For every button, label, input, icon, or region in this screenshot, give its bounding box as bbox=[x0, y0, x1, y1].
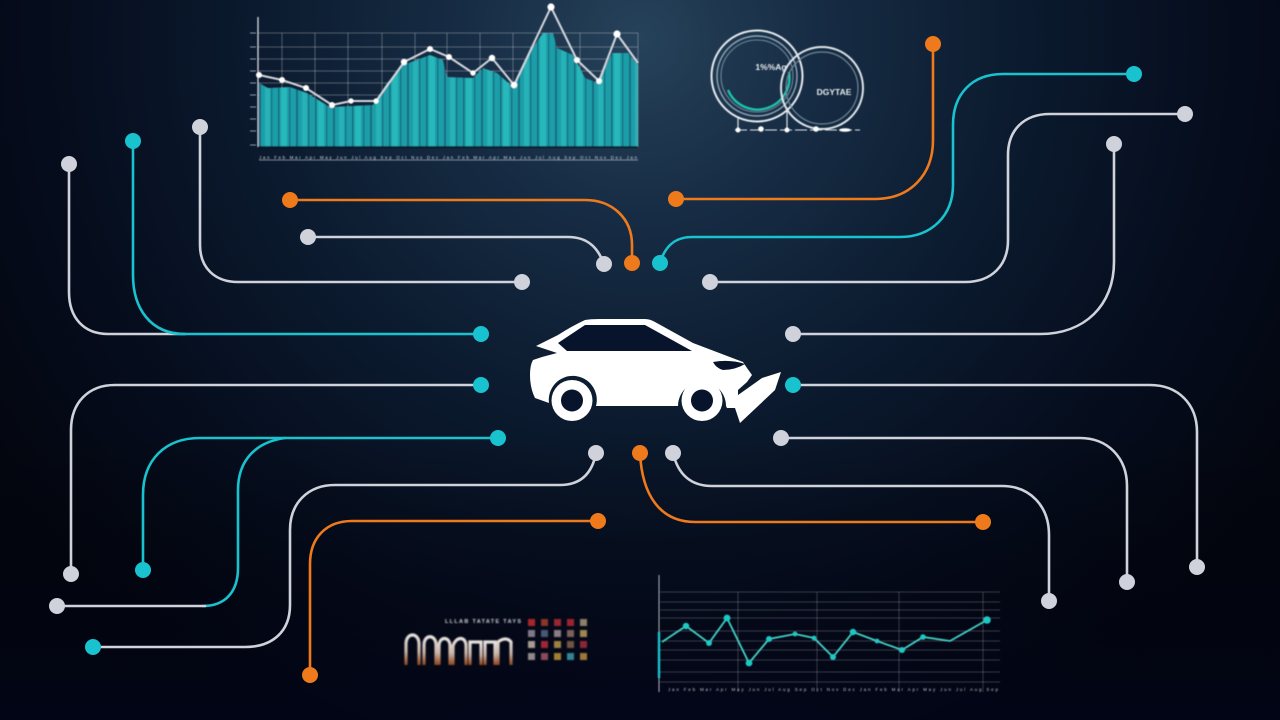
right circle: DGYTAE bbox=[817, 87, 852, 97]
teal dots bbox=[85, 66, 1142, 655]
grey line right upper bbox=[793, 144, 1114, 334]
data line bbox=[662, 618, 987, 663]
grey line upper right bbox=[710, 114, 1185, 282]
line chart bottom right bbox=[659, 575, 1000, 692]
car body and bolt bbox=[530, 319, 781, 423]
highlighted axis segment bbox=[658, 632, 660, 678]
left circle: 1%%Ag bbox=[755, 62, 787, 72]
data points bbox=[683, 615, 991, 666]
rear wheel bbox=[552, 380, 592, 421]
front wheel bbox=[682, 380, 722, 421]
grid bbox=[660, 592, 1000, 692]
data line bbox=[259, 7, 638, 105]
axis bbox=[658, 575, 660, 692]
left circle bbox=[712, 30, 802, 122]
orange dots bbox=[282, 36, 991, 683]
window bbox=[558, 325, 692, 351]
teal bars bbox=[259, 33, 638, 147]
timeline below circles bbox=[735, 108, 860, 132]
month labels: Jan Feb Mar Apr May Jun Jul Aug Sep Oct Nov Dec Jan Feb Mar Apr May Jun Jul Aug Sep Oct Nov Dec Jan bbox=[259, 155, 637, 160]
teal branch lower left bbox=[203, 438, 285, 606]
teal line lower left bbox=[143, 438, 498, 570]
right circle bbox=[781, 47, 863, 129]
grey line left upper bbox=[69, 164, 185, 334]
grey line top left bbox=[200, 127, 522, 282]
grey line bottom far left bbox=[57, 605, 205, 607]
date labels: Jan Feb Mar Apr May Jun Jul Aug Sep Oct Nov Dec Jan Feb Mar Apr May Jun Jul Aug Sep bbox=[668, 687, 998, 692]
headlight bbox=[713, 361, 745, 370]
teal line left upper bbox=[133, 141, 481, 334]
table of gauges and icons bbox=[406, 619, 587, 665]
data points bbox=[256, 3, 621, 108]
arch columns bbox=[406, 628, 517, 665]
table header: LLLAB TATATE TAYS bbox=[445, 619, 521, 625]
grey dots bbox=[49, 106, 1205, 614]
grey line bottom right bbox=[673, 453, 1049, 601]
overlapping circles diagram bbox=[712, 30, 863, 132]
orange line top right bbox=[676, 44, 933, 199]
circuit lines bbox=[57, 44, 1197, 675]
icon: car with lightning bolt bbox=[530, 319, 781, 423]
grey line right lower bbox=[781, 438, 1127, 582]
grey line right middle bbox=[793, 385, 1197, 567]
teal line top right bbox=[660, 74, 1134, 263]
grey line bottom left long bbox=[93, 453, 596, 647]
grey line top centre left bbox=[308, 237, 604, 264]
chart axes bbox=[250, 17, 638, 160]
bar and line chart bbox=[250, 3, 638, 160]
chart grid bbox=[258, 33, 638, 147]
icon grid bbox=[528, 619, 587, 660]
grey line left middle bbox=[71, 385, 481, 574]
orange line bottom left bbox=[310, 521, 598, 675]
orange line top left bbox=[290, 200, 632, 263]
orange line bottom right bbox=[640, 453, 983, 522]
